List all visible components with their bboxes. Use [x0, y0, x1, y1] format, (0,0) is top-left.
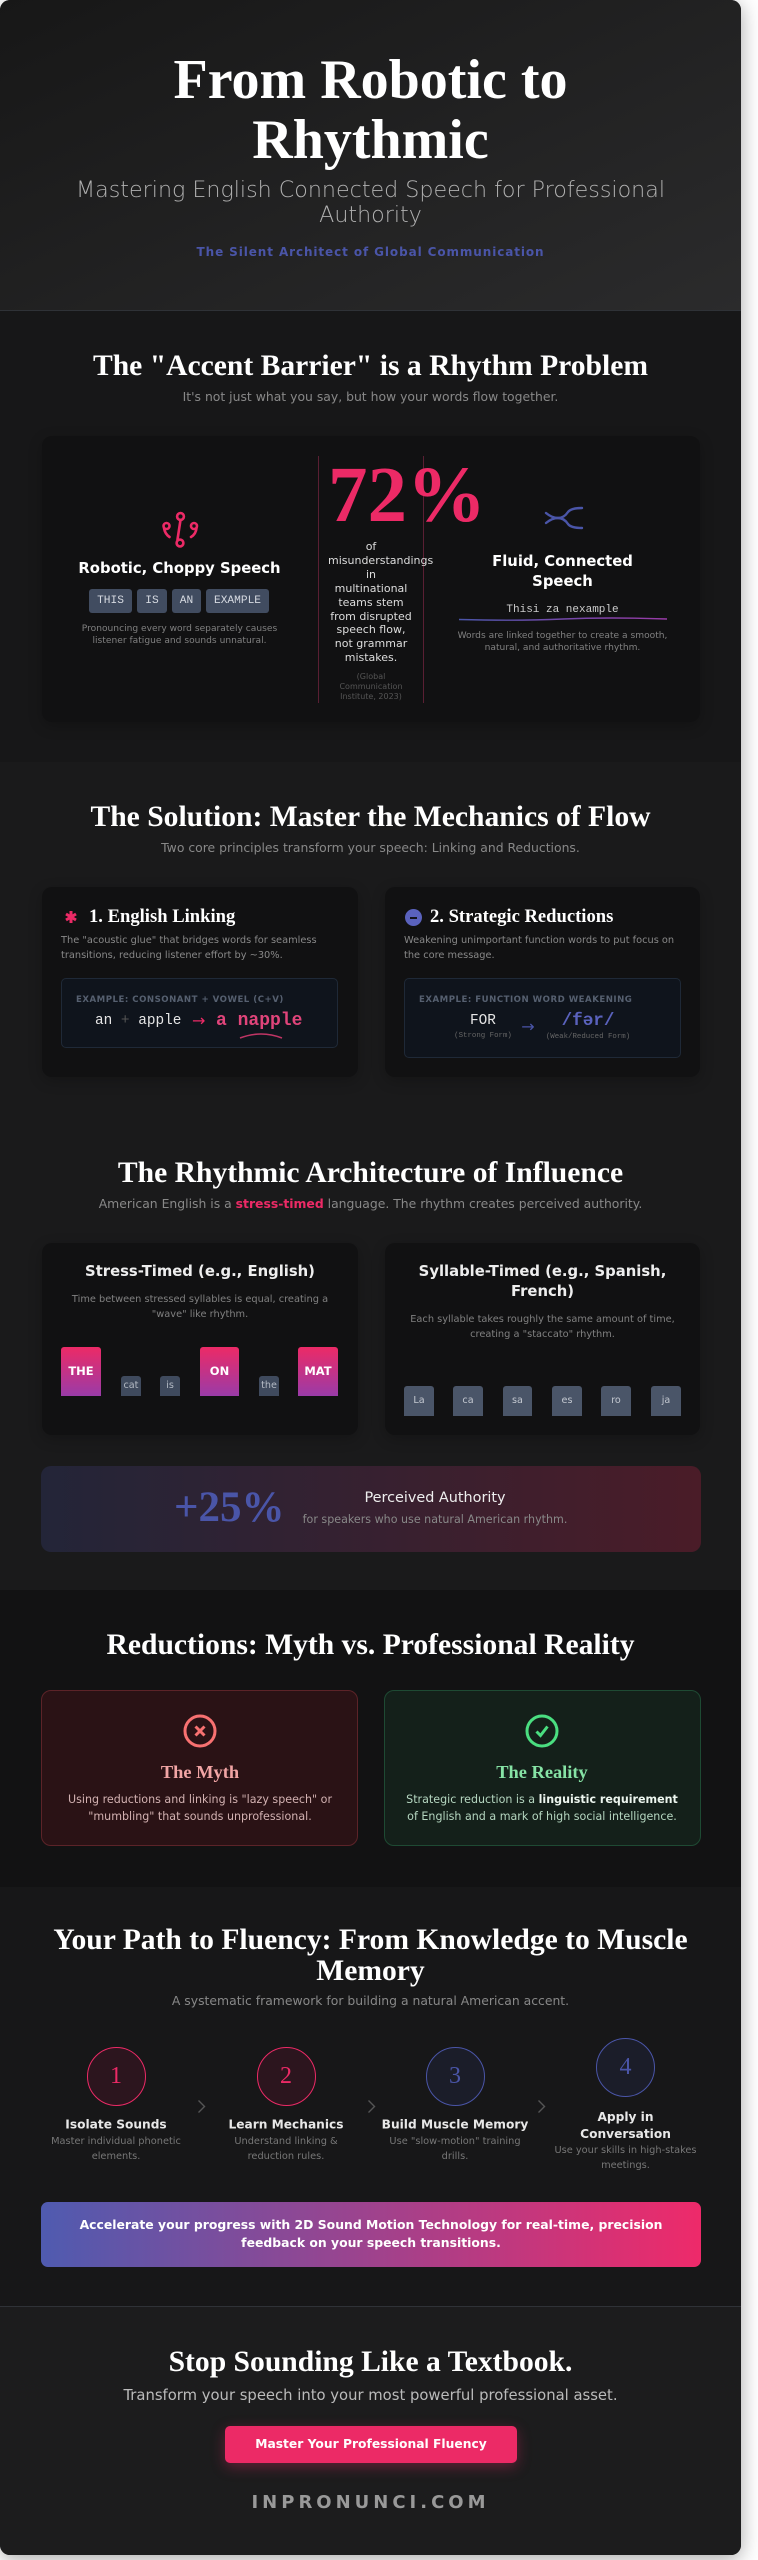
- text: syllable-timed description: creating a "staccato" rhythm.: [470, 1328, 615, 1340]
- formula source words: an + apple: [95, 1013, 181, 1029]
- text: stat source: Communication: [339, 682, 403, 691]
- text: reality: Strategic reduction is a linguistic requirement: [406, 1792, 678, 1806]
- heading: stress-timed: Stress-Timed (e.g., English): [85, 1263, 315, 1280]
- icon: cross: [184, 1714, 216, 1748]
- text: fluid description: natural, and authoritative rhythm.: [485, 643, 640, 653]
- text: linking description: The "acoustic glue" that bridges words for seamless: [61, 935, 317, 946]
- chip: THIS: [89, 589, 132, 613]
- heading: path to fluency: Your Path to Fluency: From Knowledge to Muscle: [53, 1924, 688, 1956]
- section: path to fluency background: [0, 1887, 741, 2306]
- step 2 title: Learn Mechanics: [228, 2118, 344, 2132]
- step 4 title: [580, 2110, 671, 2140]
- button: call to action: Master Your Professional Fluency: [255, 2437, 487, 2451]
- tagline: The Silent Architect of Global Communication: [197, 245, 544, 259]
- step 1 circle: 1: [110, 2063, 122, 2089]
- heading: syllable-timed: French): [511, 1283, 574, 1300]
- text: perceived authority: Perceived Authority: [364, 1490, 506, 1506]
- chip: IS: [137, 589, 167, 613]
- heading: path to fluency: Memory: [316, 1954, 425, 1986]
- icon: check: [526, 1714, 558, 1748]
- text: reality: [406, 1792, 678, 1822]
- text: stat source: [339, 672, 403, 701]
- text: technology: [80, 2216, 662, 2252]
- step 1: [51, 2047, 181, 2162]
- heading: the reality: The Reality: [496, 1762, 588, 1782]
- arrow 2: [368, 2100, 376, 2113]
- text: robotic description: [82, 624, 277, 646]
- weak form: /fər/: [562, 1011, 614, 1031]
- step 3 description: [389, 2136, 521, 2162]
- step 4 description: meetings.: [601, 2160, 650, 2170]
- button: call to action: [225, 2426, 517, 2463]
- bar: es: [552, 1386, 582, 1416]
- stat: 72%: 72%: [328, 452, 486, 539]
- banner: perceived authority: [41, 1466, 701, 1552]
- text: reality: of English and a mark of high social intelligence.: [407, 1810, 677, 1822]
- text: robotic description: Pronouncing every word separately causes: [82, 624, 277, 634]
- step 4: [554, 2038, 697, 2170]
- text: linking description: [61, 935, 317, 961]
- text: stat description: mistakes.: [345, 651, 397, 664]
- bar: ca: ca: [462, 1395, 474, 1406]
- text: linked example: Thisi za nexample: [506, 604, 619, 616]
- bar: sa: [503, 1386, 532, 1416]
- label: reductions example: EXAMPLE: FUNCTION WORD WEAKENING: [419, 995, 632, 1005]
- arc: linking: [240, 1033, 282, 1039]
- icon: reduction: [405, 909, 422, 926]
- title: Rhythmic: [252, 109, 489, 171]
- text: speakers note: for speakers who use natural American rhythm.: [303, 1513, 567, 1526]
- subheading: accent barrier: It's not just what you say, but how your words flow together.: [183, 389, 558, 404]
- text: closing: Transform your speech into your most powerful professional asset.: [123, 2387, 618, 2404]
- text: stat source: (Global: [357, 672, 385, 681]
- subtitle: Mastering English Connected Speech for Professional: [76, 177, 665, 203]
- bar: es: es: [562, 1395, 572, 1406]
- bar: ON: ON: [210, 1364, 229, 1378]
- text: stat description: in: [366, 568, 376, 581]
- formula arrow: →: [192, 1011, 205, 1030]
- heading: syllable-timed: Syllable-Timed (e.g., Spanish,: [419, 1263, 666, 1280]
- stat column borders: [318, 456, 424, 703]
- heading: solution: The Solution: Master the Mechanics of Flow: [90, 801, 651, 833]
- heading: accent barrier: The "Accent Barrier" is a Rhythm Problem: [93, 350, 648, 382]
- section: solution and rhythm background: [0, 762, 741, 1590]
- heading: syllable-timed: [419, 1263, 666, 1300]
- bar: the: [259, 1376, 279, 1396]
- panel: stress-timed: [42, 1243, 358, 1435]
- step 3 circle: 3: [449, 2063, 461, 2089]
- chip: THIS: THIS: [97, 595, 124, 607]
- stat: +25%: +25%: [174, 1484, 285, 1531]
- label: linking example: EXAMPLE: CONSONANT + VOWEL (C+V): [76, 995, 284, 1005]
- heading: path to fluency: [53, 1924, 688, 1986]
- arrow 1: [198, 2100, 206, 2113]
- footer brand: INPRONUNCI.COM: [251, 2492, 490, 2513]
- heading: the myth: The Myth: [161, 1762, 239, 1782]
- step 4 description: [554, 2144, 697, 2170]
- icon: choppy speech: [162, 512, 198, 548]
- heading: fluid speech: Fluid, Connected: [492, 553, 633, 570]
- arrow 3: [538, 2100, 546, 2113]
- example box: linking: [61, 978, 338, 1048]
- text: stat description: multinational: [335, 582, 407, 595]
- step 1 description: Master individual phonetic: [51, 2136, 181, 2146]
- panel: linking: [42, 887, 358, 1077]
- heading: robotic speech: Robotic, Choppy Speech: [78, 560, 281, 577]
- step 3 circle: [426, 2047, 484, 2106]
- icon: fluid speech: [544, 506, 584, 530]
- heading: rhythm: The Rhythmic Architecture of Influence: [118, 1157, 623, 1189]
- heading: linking: 1. English Linking: [89, 906, 235, 927]
- subtitle: [76, 177, 665, 228]
- bar: ro: ro: [611, 1395, 621, 1406]
- step 4 description: Use your skills in high-stakes: [554, 2144, 697, 2156]
- bar: ja: ja: [662, 1395, 670, 1406]
- subheading: rhythm: American English is a stress-timed language. The rhythm creates perceived authority.: [99, 1196, 642, 1211]
- text: stat description: of: [366, 540, 376, 553]
- subtitle: Authority: [319, 202, 422, 228]
- text: reductions description: the core message.: [404, 950, 495, 961]
- step 2 description: Understand linking &: [234, 2136, 338, 2146]
- bar: MAT: [298, 1347, 338, 1396]
- title: From Robotic to: [174, 49, 568, 111]
- bar: MAT: MAT: [304, 1364, 332, 1378]
- strong form: FOR: [470, 1013, 496, 1029]
- step 2 description: reduction rules.: [248, 2150, 324, 2162]
- subheading: path to fluency: A systematic framework for building a natural American accent.: [172, 1993, 569, 2008]
- bar: the: the: [261, 1380, 277, 1391]
- step 3: [382, 2047, 528, 2162]
- text: technology: feedback on your speech transitions.: [241, 2235, 501, 2250]
- step 3 description: Use "slow-motion" training: [389, 2136, 521, 2146]
- text: stat description: misunderstandings: [328, 554, 433, 567]
- text: syllable-timed description: [410, 1314, 675, 1340]
- arrow: →: [521, 1017, 535, 1036]
- step 4 circle: 4: [620, 2054, 632, 2080]
- text: myth: "mumbling" that sounds unprofessional.: [88, 1810, 312, 1822]
- icon: link: [65, 911, 77, 923]
- text: fluid description: [458, 631, 667, 653]
- chip: EXAMPLE: EXAMPLE: [214, 595, 261, 607]
- subheading: solution: Two core principles transform your speech: Linking and Reductions.: [161, 840, 580, 855]
- step 4 circle: [596, 2038, 655, 2097]
- bar: ro: [601, 1386, 631, 1416]
- example box: reductions: [404, 978, 681, 1058]
- step 1 description: elements.: [92, 2150, 140, 2162]
- panel: syllable-timed: [385, 1243, 700, 1435]
- formula: linking: [95, 1011, 302, 1031]
- chip: EXAMPLE: [206, 589, 269, 613]
- step 2 description: [234, 2136, 338, 2162]
- chip: IS: IS: [145, 595, 159, 607]
- step 2: [228, 2047, 344, 2162]
- chip: AN: [172, 589, 201, 613]
- step 3 description: drills.: [442, 2150, 468, 2162]
- bar: is: is: [166, 1380, 174, 1391]
- text: stat description: from disrupted: [330, 610, 412, 623]
- step 2 circle: [256, 2047, 316, 2106]
- text: stat source: Institute, 2023): [340, 692, 402, 701]
- text: robotic description: listener fatigue and sounds unnatural.: [93, 636, 266, 646]
- step 1 description: [51, 2136, 181, 2162]
- step 1 circle: [86, 2047, 146, 2106]
- section: closing call to action background: [0, 2306, 741, 2555]
- chip: AN: AN: [180, 595, 193, 607]
- strong form caption: (Strong Form): [454, 1032, 512, 1040]
- bar: cat: [121, 1376, 141, 1396]
- step 3 title: Build Muscle Memory: [382, 2118, 528, 2132]
- text: fluid description: Words are linked together to create a smooth,: [458, 631, 667, 641]
- step 2 circle: 2: [280, 2063, 292, 2089]
- panel: reality: [384, 1690, 701, 1846]
- text: stat description: [328, 540, 433, 664]
- text: syllable-timed description: Each syllable takes roughly the same amount of time,: [410, 1314, 675, 1324]
- bar: THE: THE: [68, 1364, 94, 1378]
- bar: is: [160, 1376, 180, 1396]
- step 4 title: Conversation: [580, 2126, 671, 2140]
- heading: fluid speech: Speech: [532, 573, 593, 590]
- panel: myth: [41, 1690, 358, 1846]
- title: [174, 49, 568, 171]
- heading: myth vs reality: Reductions: Myth vs. Professional Reality: [106, 1629, 635, 1661]
- text: myth: Using reductions and linking is "lazy speech" or: [68, 1792, 332, 1806]
- bar: ja: [651, 1386, 681, 1416]
- text: stat description: speech flow,: [337, 623, 405, 636]
- text: reductions description: Weakening unimportant function words to put focus on: [404, 935, 674, 946]
- underline: wave: [459, 617, 667, 621]
- bar: THE: [61, 1347, 101, 1396]
- text: stat description: not grammar: [335, 637, 407, 650]
- bar: ON: [200, 1347, 239, 1396]
- rhythm bars: syllable-timed: [404, 1386, 681, 1416]
- text: stress-timed description: "wave" like rhythm.: [152, 1309, 248, 1320]
- bar: La: [404, 1386, 434, 1416]
- text: myth: [68, 1792, 332, 1822]
- heading: closing: Stop Sounding Like a Textbook.: [169, 2346, 572, 2378]
- panel: reductions: [385, 887, 700, 1077]
- text: reductions description: [404, 935, 674, 961]
- rhythm bars: stress-timed: [61, 1347, 338, 1396]
- banner: technology: [41, 2202, 701, 2267]
- word chips: [89, 589, 269, 613]
- text: stat description: teams stem: [338, 596, 404, 609]
- bar: La: La: [413, 1395, 425, 1406]
- step 1 title: Isolate Sounds: [65, 2118, 167, 2132]
- section: header background: [0, 0, 741, 311]
- formula result: a napple: [216, 1011, 302, 1031]
- weak form caption: (Weak/Reduced Form): [546, 1033, 630, 1041]
- text: stress-timed description: [72, 1294, 328, 1320]
- bar: ca: [453, 1386, 483, 1416]
- section: myth vs reality background: [0, 1590, 741, 1887]
- panel: comparison: [42, 436, 700, 722]
- step 4 title: Apply in: [597, 2110, 654, 2124]
- section: accent barrier background: [0, 311, 741, 762]
- text: technology: Accelerate your progress with 2D Sound Motion Technology for real-time, precision: [80, 2217, 662, 2232]
- heading: fluid speech: [492, 553, 633, 590]
- text: linking description: transitions, reducing listener effort by ~30%.: [61, 950, 283, 961]
- bar: cat: cat: [124, 1380, 138, 1391]
- text: stress-timed description: Time between stressed syllables is equal, creating a: [72, 1294, 328, 1305]
- heading: reductions: 2. Strategic Reductions: [430, 906, 613, 927]
- bar: sa: sa: [512, 1395, 523, 1406]
